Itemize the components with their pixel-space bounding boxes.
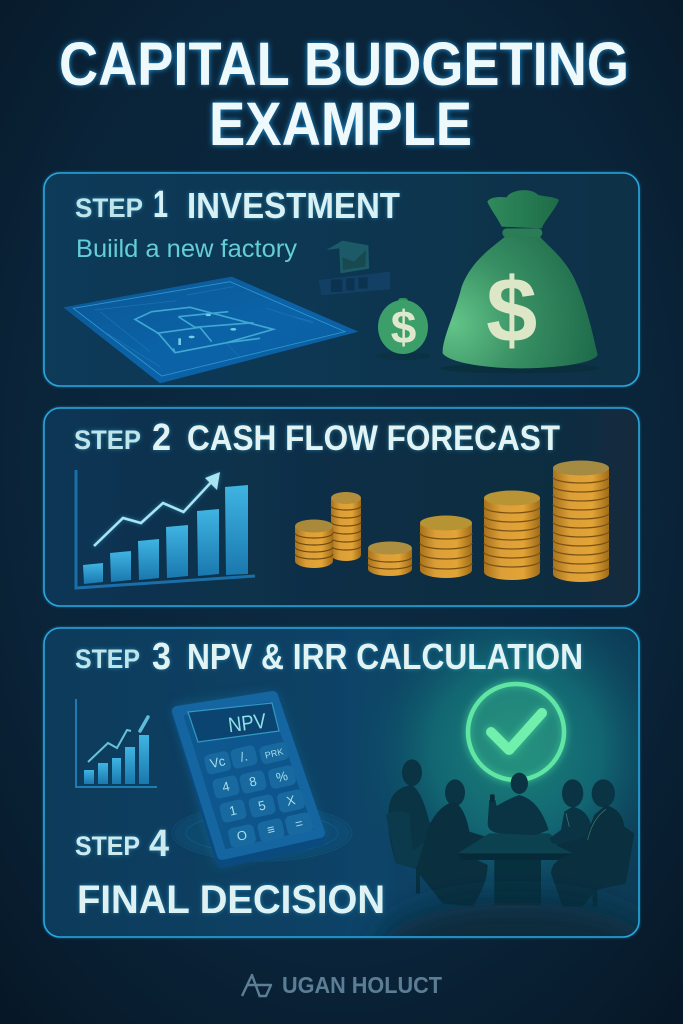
- subheading: Buiild a new factory: [76, 235, 298, 263]
- heading: step 3: [75, 636, 583, 678]
- icon: money bag: $: [486, 260, 537, 362]
- heading: final decision: FINAL DECISION: [77, 878, 385, 922]
- heading: step 4: STEP: [75, 831, 140, 861]
- coin stack 4: [420, 516, 472, 578]
- calculator keys: PRK: [264, 747, 284, 760]
- icon: logo mark: [242, 975, 271, 997]
- line arrow: [94, 472, 220, 546]
- coin stack 2: [331, 492, 361, 561]
- heading: step 2: 2: [152, 417, 171, 459]
- title: CAPITAL BUDGETING: [59, 30, 629, 98]
- calculator keys: O: [235, 827, 249, 844]
- calculator keys: /.: [239, 748, 249, 765]
- calculator keys: Vc: [209, 753, 227, 771]
- calculator keys: 5: [257, 797, 267, 814]
- icon: approval check mark: [468, 684, 564, 780]
- heading: step 1: 1: [153, 184, 168, 226]
- heading: step 2: STEP: [74, 425, 141, 455]
- title: EXAMPLE: [209, 90, 472, 158]
- coin stacks: [295, 460, 609, 582]
- person 1: [386, 759, 456, 870]
- small bar chart: [76, 699, 157, 787]
- calculator keys: 8: [248, 773, 258, 790]
- icon: small factory: [319, 241, 390, 295]
- calculator screen: [188, 703, 279, 742]
- calculator keys: [203, 741, 314, 849]
- calculator keys: X: [285, 792, 297, 809]
- silhouettes: meeting team around table: [386, 759, 634, 907]
- title: [59, 30, 629, 158]
- panel: step 3 and step 4: [42, 626, 642, 940]
- heading: step 3: 3: [152, 636, 171, 678]
- heading: step 3: STEP: [75, 644, 140, 674]
- calculator keys: %: [275, 768, 290, 785]
- table: [458, 833, 573, 905]
- icon: dollar coin: [375, 298, 431, 360]
- floor shadow: [374, 890, 638, 936]
- coin stack 6: [553, 460, 609, 582]
- calculator keys: 4: [221, 778, 231, 795]
- panel: step 1 investment: [44, 173, 639, 386]
- coin stack 1: [295, 520, 333, 568]
- heading: step 3: NPV & IRR CALCULATION: [187, 636, 583, 677]
- heading: step 1: [75, 184, 400, 226]
- calculator keys: 1: [228, 802, 238, 819]
- panel: step 2 cash flow forecast: [44, 408, 639, 606]
- bar chart with rising arrow: [76, 470, 255, 588]
- coin stack 3: [368, 542, 412, 576]
- person 3: [488, 773, 549, 835]
- icon: calculator: [172, 692, 352, 866]
- calculator keys: =: [294, 815, 304, 832]
- heading: step 1: INVESTMENT: [187, 185, 400, 226]
- coin stack 5: [484, 490, 540, 580]
- heading: step 2: CASH FLOW FORECAST: [187, 419, 560, 458]
- footer logo: [242, 972, 442, 998]
- logo text: UGAN HOLUCT: [282, 972, 442, 998]
- calculator screen: NPV: [227, 710, 267, 737]
- heading: step 2: [74, 417, 560, 459]
- heading: step 4: [75, 823, 169, 865]
- person 5: [416, 779, 634, 907]
- icon: blueprint: [63, 277, 358, 383]
- icon: dollar coin: $: [391, 301, 416, 353]
- icon: money bag: [440, 190, 600, 373]
- heading: step 1: STEP: [75, 193, 143, 223]
- person 2: [416, 779, 488, 907]
- calculator keys: ≡: [266, 821, 276, 838]
- heading: step 4: 4: [149, 823, 169, 865]
- person 4: [549, 779, 592, 847]
